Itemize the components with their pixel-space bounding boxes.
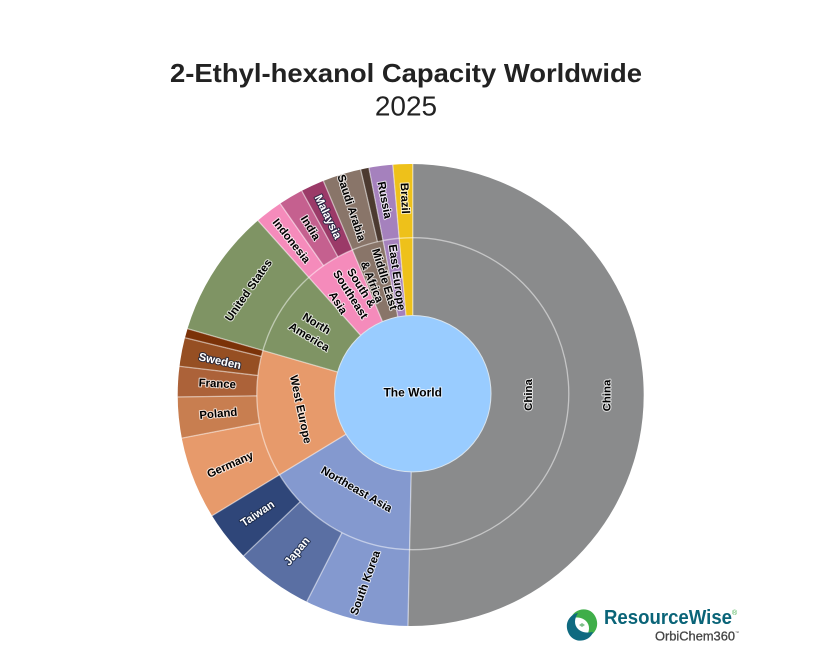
label: Asia: Asia (326, 290, 349, 317)
label: South Korea: South Korea (349, 549, 383, 617)
label: America: America (286, 321, 332, 355)
label: East Europe: East Europe (386, 244, 407, 311)
label: West Europe: West Europe (287, 374, 313, 445)
label: Taiwan: Taiwan (239, 499, 277, 530)
label: Brazil: Brazil (398, 183, 411, 214)
hub: The World (335, 316, 491, 472)
registered mark: ® (732, 609, 738, 617)
label: India: India (298, 214, 322, 243)
subtitle: year: 2025 (375, 90, 437, 122)
label: United States: United States (223, 257, 275, 324)
label: China region: China (523, 379, 535, 411)
title: 2-Ethyl-hexanol Capacity Worldwide (170, 58, 642, 88)
label: Malaysia: Malaysia (312, 193, 344, 242)
label: Japan: Japan (282, 535, 313, 568)
label: Germany: Germany (205, 449, 256, 481)
label: Saudi Arabia: Saudi Arabia (334, 173, 367, 243)
label: The World: The World (383, 386, 442, 400)
outer ring: countries (213, 194, 613, 594)
wordmark: ResourceWise (604, 607, 732, 629)
sunburst chart (169, 150, 614, 637)
label: Sweden: Sweden (197, 351, 242, 372)
label: China country: China (602, 379, 614, 411)
label: Indonesia: Indonesia (270, 217, 313, 266)
logo: ResourceWise OrbiChem360 (567, 607, 739, 644)
label: North: North (300, 311, 332, 337)
label: & Africa: & Africa (358, 260, 385, 305)
sub-brand: OrbiChem360 (655, 628, 735, 644)
label: Middle East: Middle East (369, 247, 399, 312)
icon: swirl mark (567, 609, 597, 641)
label: France: France (198, 377, 236, 391)
label: Southeast: Southeast (330, 268, 370, 321)
trademark: ™ (735, 630, 739, 635)
middle ring: regions (296, 277, 530, 511)
label: Northeast Asia: Northeast Asia (319, 465, 394, 515)
label: South &: South & (344, 267, 378, 310)
label: Russia: Russia (375, 181, 394, 220)
label: Poland: Poland (199, 407, 238, 422)
labels (197, 173, 614, 617)
